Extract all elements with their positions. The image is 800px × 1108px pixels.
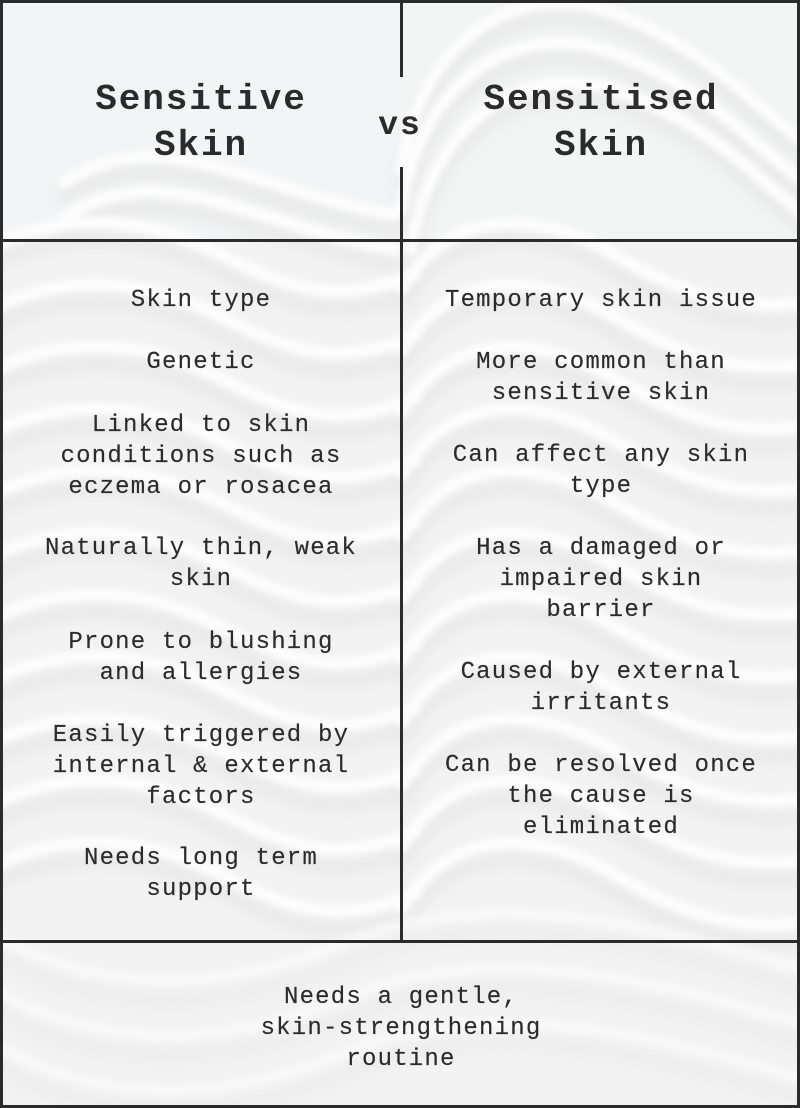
text: resolved: Can be resolved once	[445, 752, 757, 779]
text: resolved	[445, 752, 757, 841]
text: long term support	[84, 845, 318, 903]
text: genetic: Genetic	[146, 349, 256, 376]
text: skin type: Skin type	[131, 287, 271, 314]
text: damaged barrier: Has a damaged or	[476, 535, 726, 562]
text: long term support: support	[146, 876, 256, 903]
text: damaged barrier: barrier	[546, 597, 656, 624]
text: resolved: the cause is	[507, 783, 695, 810]
heading: vs: vs	[378, 107, 422, 144]
text: more common: More common than	[476, 349, 726, 376]
heading: Sensitive Skin: Skin	[154, 125, 248, 166]
text: more common: sensitive skin	[492, 380, 710, 407]
heading: Sensitive Skin	[95, 79, 307, 166]
text: temporary: Temporary skin issue	[445, 287, 757, 314]
heading: Sensitised Skin: Skin	[554, 125, 648, 166]
text: damaged barrier	[476, 535, 726, 624]
heading: Sensitised Skin	[483, 79, 719, 166]
heading: Sensitised Skin: Sensitised	[483, 79, 719, 120]
bottom panel: shared need: skin-strengthening	[261, 1015, 541, 1042]
bottom panel: shared need: Needs a gentle,	[284, 984, 518, 1011]
text: more common	[476, 349, 726, 407]
left column: sensitive skin traits	[45, 287, 357, 903]
text: any skin type	[453, 442, 749, 500]
text: any skin type: type	[570, 473, 632, 500]
text: triggers	[53, 722, 349, 811]
text: blushing: Prone to blushing	[68, 629, 334, 656]
text: external irritants	[461, 659, 741, 717]
text: damaged barrier: impaired skin	[500, 566, 702, 593]
text: resolved: eliminated	[523, 814, 679, 841]
text: triggers: factors	[146, 784, 256, 811]
text: blushing	[68, 629, 334, 687]
text: linked conditions: Linked to skin	[92, 412, 310, 439]
text: triggers: internal & external	[53, 753, 349, 780]
text: external irritants: Caused by external	[461, 659, 741, 686]
text: triggers: Easily triggered by	[53, 722, 349, 749]
text: thin skin	[45, 535, 357, 593]
text: blushing: and allergies	[100, 660, 302, 687]
right column: sensitised skin traits	[445, 287, 757, 841]
text: external irritants: irritants	[531, 690, 671, 717]
text: long term support: Needs long term	[84, 845, 318, 872]
bottom panel: shared need: routine	[346, 1046, 456, 1073]
heading: Sensitive Skin: Sensitive	[95, 79, 307, 120]
text: linked conditions: eczema or rosacea	[68, 474, 334, 501]
text: any skin type: Can affect any skin	[453, 442, 749, 469]
text: thin skin: Naturally thin, weak	[45, 535, 357, 562]
text: linked conditions: conditions such as	[61, 443, 341, 470]
text: thin skin: skin	[170, 566, 232, 593]
bottom panel: shared need	[261, 984, 541, 1073]
text: linked conditions	[61, 412, 341, 501]
